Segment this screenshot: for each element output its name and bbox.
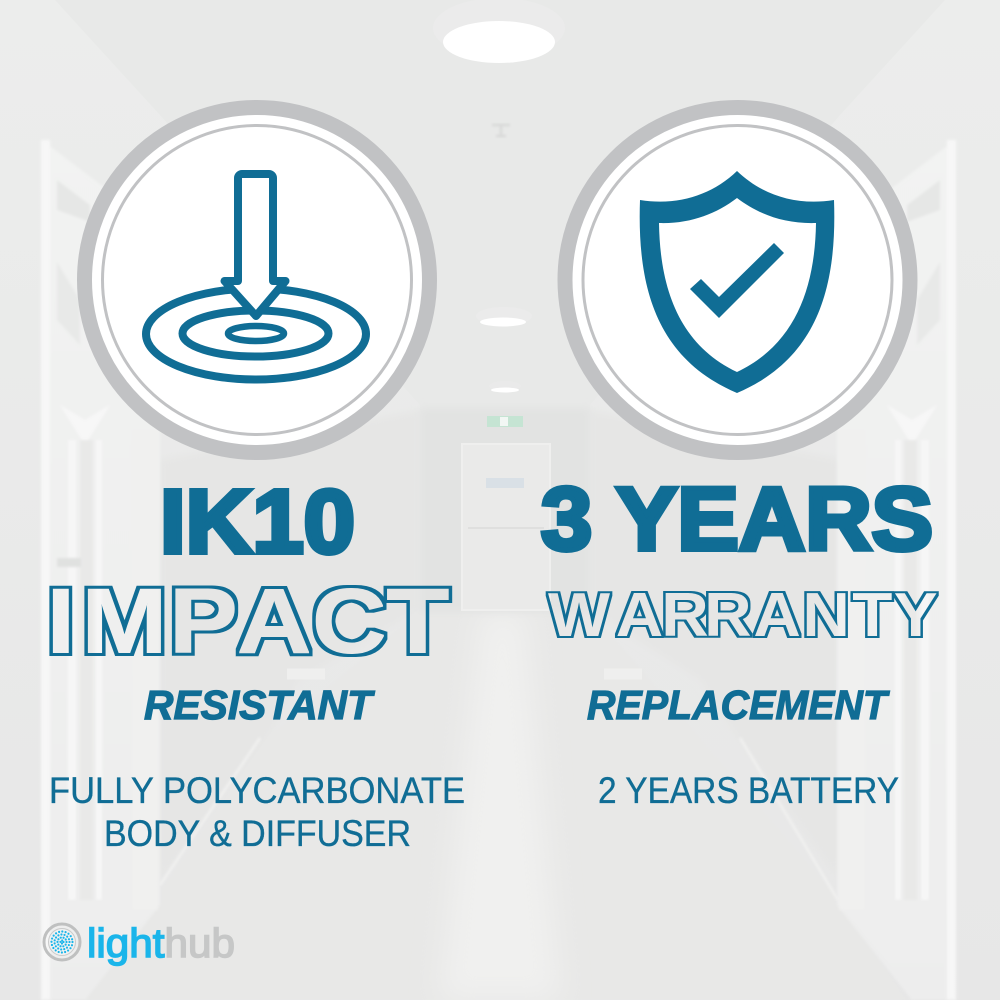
panel: 3 years warranty (541, 108, 938, 811)
door sign (486, 478, 524, 488)
door push bar (468, 527, 544, 529)
ceiling lamp: far (489, 381, 521, 392)
logo: lighthub (44, 920, 235, 966)
text: body description: BODY & DIFFUSER (104, 812, 411, 854)
right door (837, 140, 956, 1000)
lower right wall shade (590, 410, 840, 880)
lower left wall shade (160, 410, 420, 880)
text: body description (49, 769, 465, 854)
subheading: REPLACEMENT: REPLACEMENT (587, 682, 890, 728)
heading: IMPACT outline: IMPACT (46, 570, 449, 672)
floor (85, 610, 905, 1000)
icon: arrow striking target (146, 174, 366, 380)
left wall (0, 0, 420, 1000)
text: battery note: 2 YEARS BATTERY (598, 769, 899, 811)
badge: warranty circle (565, 108, 910, 452)
sprinkler (492, 125, 510, 136)
left door (41, 140, 160, 1000)
panel: IK10 impact (46, 108, 465, 854)
right wall (590, 0, 1000, 1000)
skirting lines (160, 738, 838, 900)
exit sign (487, 416, 523, 427)
heading: WARRANTY outline: WARRANTY (548, 580, 938, 649)
heading: 3 YEARS: 3 YEARS (541, 468, 933, 568)
icon: shield with check (640, 171, 834, 393)
ceiling lamp: large (433, 0, 565, 63)
text: body description: FULLY POLYCARBONATE (49, 769, 465, 811)
badge: impact circle (84, 108, 430, 452)
floor sheen (440, 612, 560, 1000)
subheading: RESISTANT: RESISTANT (144, 682, 375, 728)
logo wordmark: lighthub (87, 920, 235, 966)
ceiling lamp: middle (476, 307, 532, 326)
back wall (420, 408, 590, 612)
skirting blocks (287, 668, 642, 680)
heading: IK10: IK10 (160, 472, 355, 572)
logo mark (44, 924, 80, 960)
exit door (462, 444, 550, 610)
